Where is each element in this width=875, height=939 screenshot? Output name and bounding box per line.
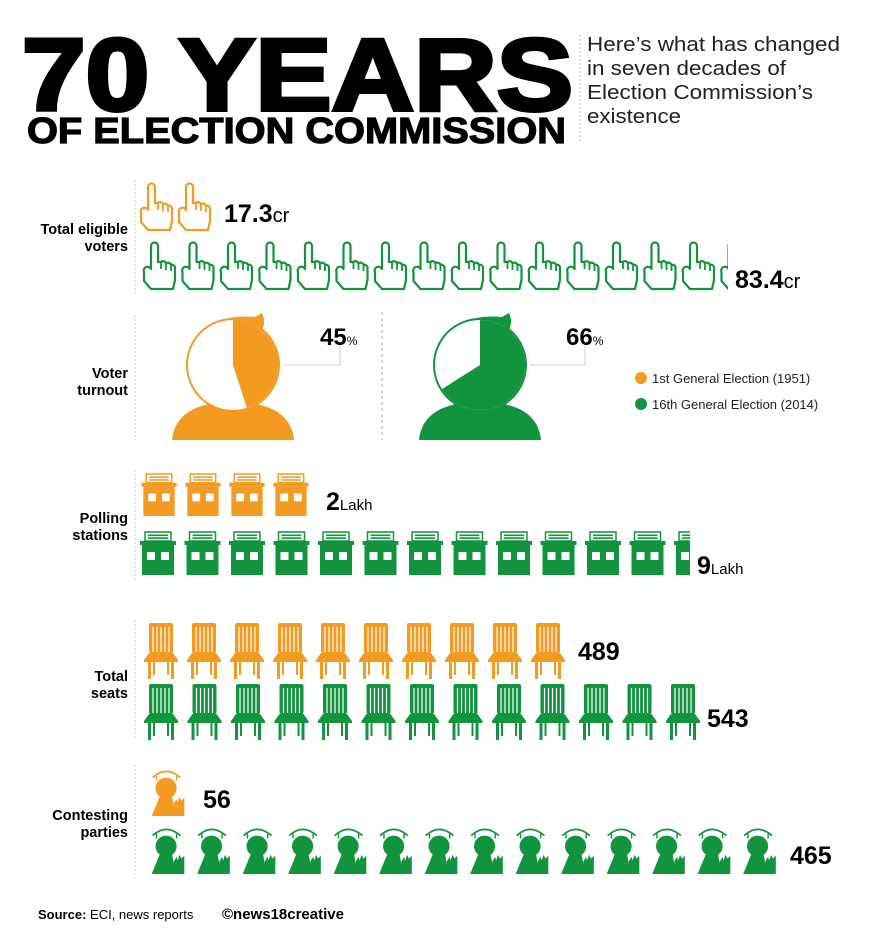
orange head pie (172, 313, 340, 440)
value 465: 465 (790, 842, 832, 870)
value 56: 56 (203, 786, 231, 814)
value 2 Lakh: 2Lakh (326, 488, 372, 516)
panel: total seats (91, 620, 749, 740)
value 9 Lakh: 9Lakh (697, 552, 743, 580)
green head pie (419, 313, 585, 440)
panel: contesting parties (52, 765, 832, 878)
value 83.4cr: 83.4cr (735, 266, 801, 294)
label: total seats: seats (91, 686, 128, 702)
label: polling stations: Polling (80, 511, 128, 527)
green party persons (152, 829, 776, 874)
orange hands (141, 184, 210, 230)
label: polling stations: stations (72, 528, 128, 544)
source footer: ©news18creative (222, 906, 344, 923)
subtitle: existence (587, 106, 681, 128)
green chairs (144, 684, 700, 740)
label: contesting parties: parties (80, 825, 128, 841)
subtitle (587, 34, 840, 128)
label: contesting parties: Contesting (52, 808, 128, 824)
label: voter turnout: turnout (77, 383, 128, 399)
label: voter turnout: Voter (92, 366, 128, 382)
subtitle: Here’s what has changed (587, 34, 840, 56)
value 17.3cr: 17.3cr (224, 200, 290, 228)
panel: voter turnout (77, 312, 818, 440)
title: OF ELECTION COMMISSION (27, 110, 566, 151)
orange chairs (144, 623, 565, 679)
panel: polling stations (72, 470, 743, 580)
value 489: 489 (578, 638, 620, 666)
value 543: 543 (707, 705, 749, 733)
subtitle: in seven decades of (587, 58, 786, 80)
value 66%: 66% (566, 324, 604, 351)
source footer: Source: ECI, news reports (38, 907, 193, 922)
panel: eligible voters (40, 180, 801, 295)
legend: 16th General Election (2014) (652, 397, 818, 412)
orange booths (141, 474, 309, 516)
orange party person (152, 771, 184, 816)
label: eligible voters: voters (84, 239, 128, 255)
green booths (140, 532, 710, 575)
label: total seats: Total (94, 669, 128, 685)
title: 70 YEARS (22, 18, 573, 132)
legend (635, 371, 818, 412)
subtitle: Election Commission’s (587, 82, 813, 104)
legend: 1st General Election (1951) (652, 371, 810, 386)
green hands (144, 242, 752, 289)
value 45%: 45% (320, 324, 358, 351)
label: eligible voters: Total eligible (40, 222, 128, 238)
